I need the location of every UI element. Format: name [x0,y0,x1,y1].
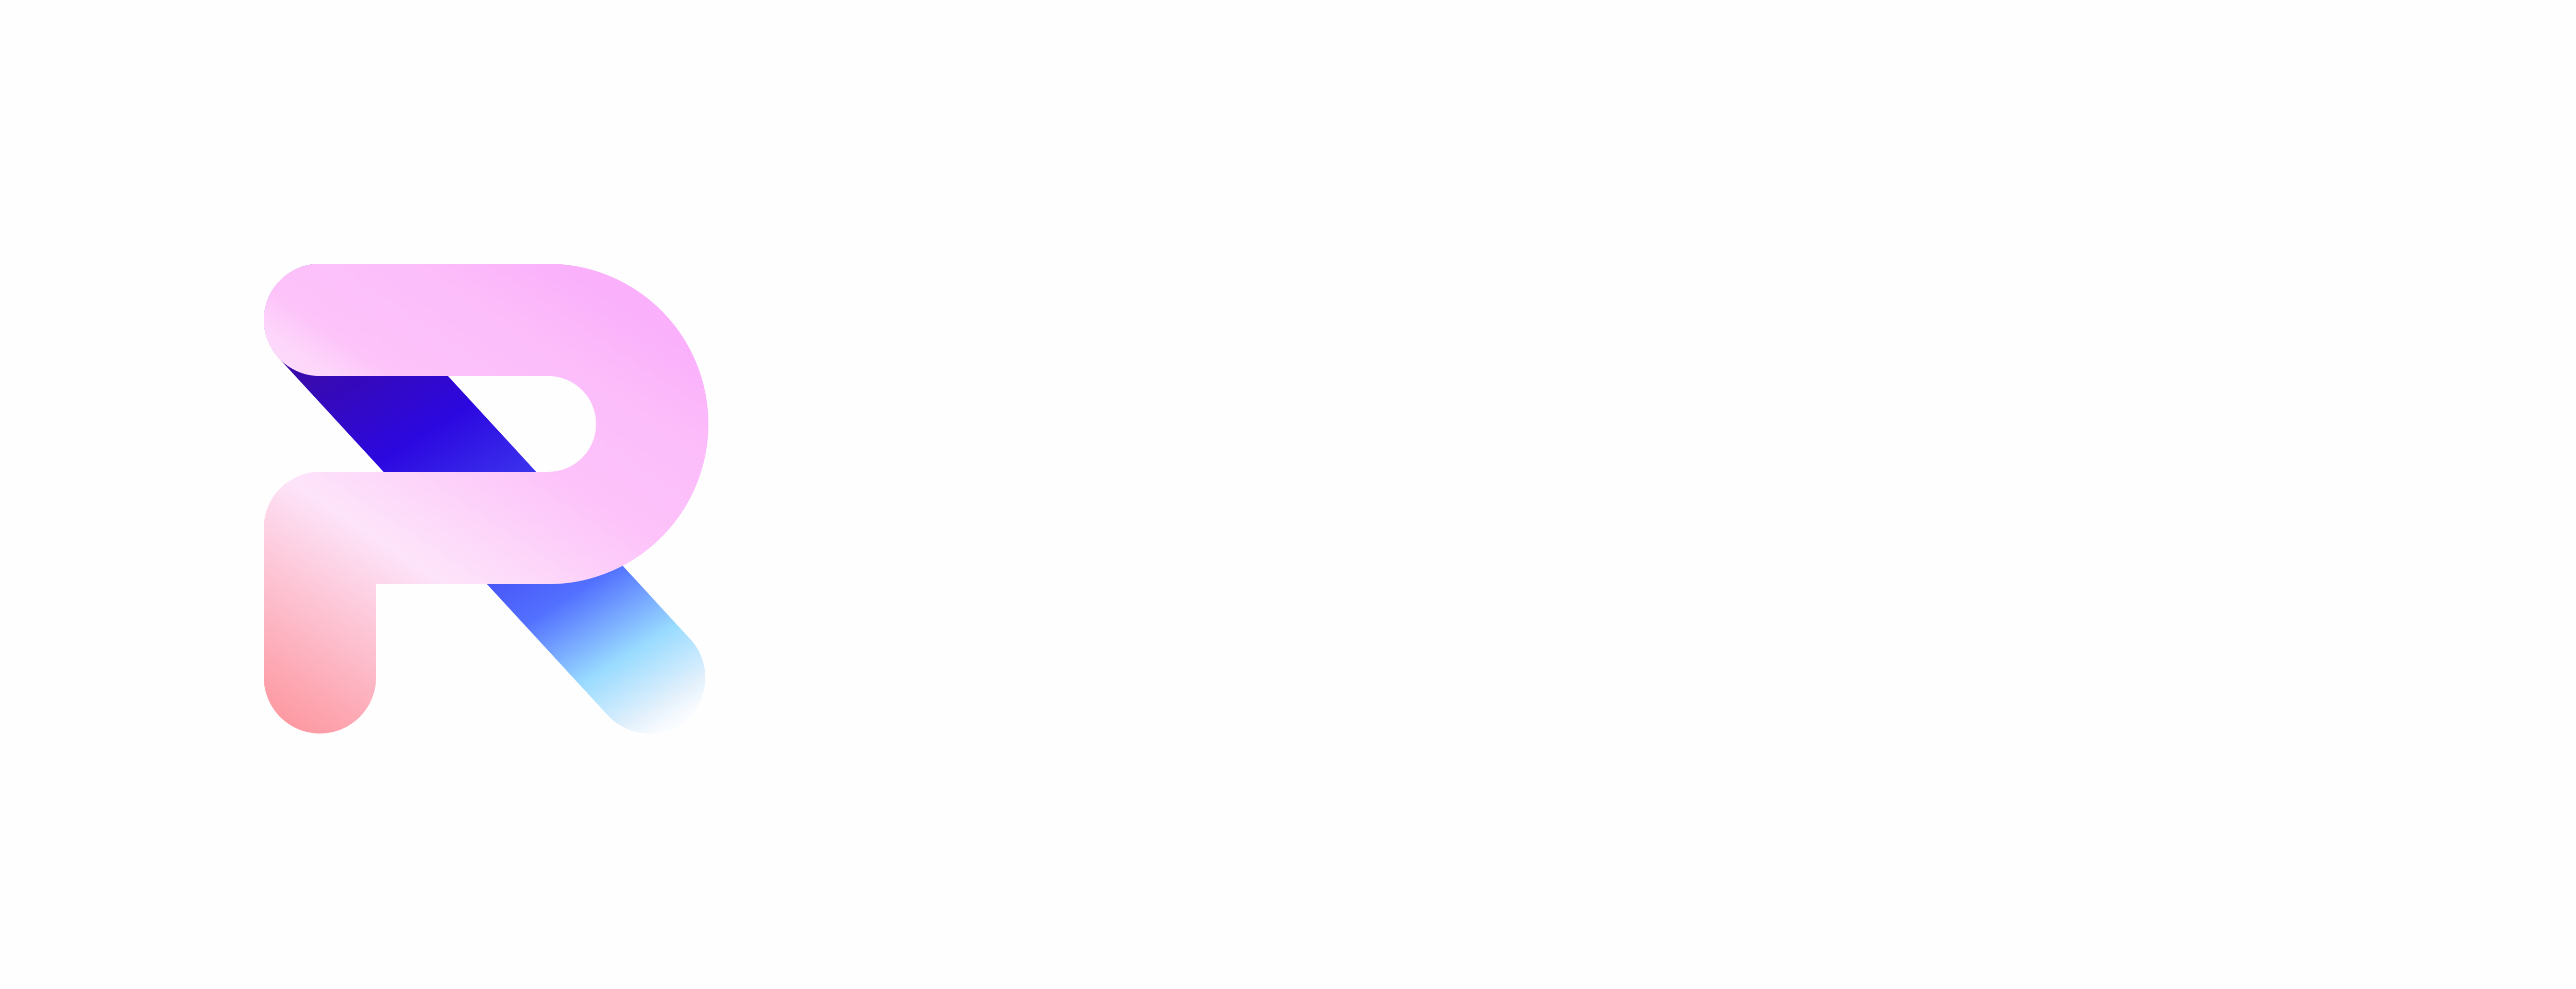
logo: gradient letter R [320,320,652,677]
logo body: pink bowl and stem [320,320,652,677]
logo highlight: pale glow on top-left cap [320,264,392,376]
logo leg: blue diagonal stroke [320,320,649,677]
